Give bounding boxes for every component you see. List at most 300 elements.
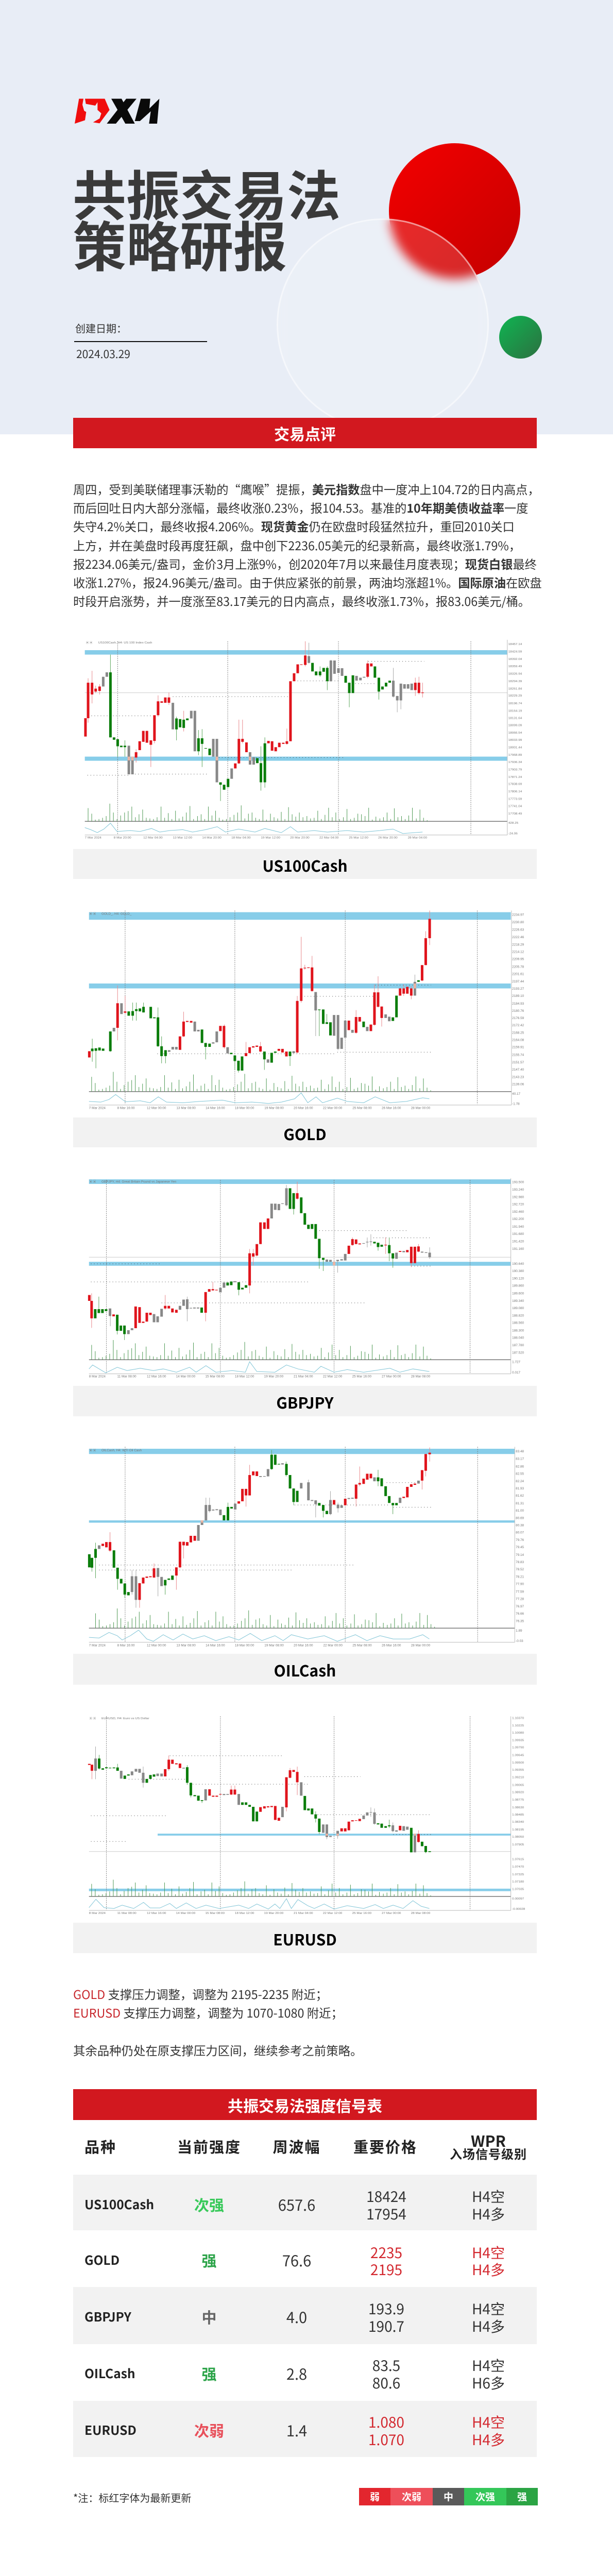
support and resistance bands (89, 1449, 515, 1523)
axis labels: 1.07035 (512, 1888, 524, 1891)
axis labels: 7 Mar 2024 (89, 1106, 106, 1110)
axis labels: 15 Mar 08:00 (206, 1375, 225, 1378)
axis labels: 82.86 (516, 1465, 524, 1469)
heading: signal table: 共振交易法强度信号表 (228, 2094, 382, 2116)
table row: US100Cash: 657.6 (278, 2194, 315, 2215)
axis labels: 83.48 (516, 1450, 524, 1453)
axis labels: 18131.64 (508, 717, 522, 720)
axis labels: 18 Mar 12:00 (235, 1375, 254, 1378)
axis labels: 81.00 (516, 1509, 524, 1513)
axis labels: 80.69 (516, 1517, 524, 1520)
axis labels: 2222.46 (512, 936, 524, 939)
axis labels: 27 Mar 00:00 (382, 1912, 401, 1915)
axis labels: 22 Mar 00:00 (323, 1643, 343, 1647)
table row: EURUSD: 1.080 (368, 2412, 404, 2432)
axis labels: 2218.29 (512, 943, 524, 946)
axis labels: 20 Mar 16:00 (294, 1643, 313, 1647)
table row: US100Cash: H4多 (472, 2204, 505, 2224)
axis labels: 2214.12 (512, 950, 524, 954)
ATR line (89, 1630, 429, 1641)
axis labels (89, 1717, 525, 1915)
volume bars (92, 1879, 431, 1896)
axis labels: 1.89 (516, 1629, 522, 1633)
table row: US100Cash (73, 2175, 537, 2230)
axis labels: 192.980 (512, 1195, 524, 1199)
axis labels: 7 Mar 2024 (85, 837, 102, 840)
axis labels: 22 Mar 04:00 (319, 837, 339, 840)
axis labels: 193.500 (512, 1180, 524, 1184)
axis labels (89, 1180, 524, 1378)
table row: GOLD (84, 2242, 505, 2280)
table row: GOLD: 76.6 (282, 2249, 311, 2271)
axis labels: OILCash, H4: WTI Oil Cash (101, 1449, 142, 1452)
axis labels: 192.200 (512, 1217, 524, 1221)
axis labels: 1.10370 (512, 1717, 524, 1720)
label: GBPJPY: GBPJPY (276, 1391, 334, 1413)
axis labels: 25 Mar 08:00 (352, 1106, 372, 1110)
axis labels: 189.860 (512, 1284, 524, 1287)
axis labels: 17741.04 (508, 805, 522, 808)
axis labels: US100Cash, H4: US 100 Index Cash (98, 641, 152, 645)
label: EURUSD: EURUSD (273, 1927, 337, 1950)
support and resistance notes: GOLD 支撑压力调整，调整为 2195-2235 附近； (73, 1985, 328, 2003)
axis labels: 2176.59 (512, 1016, 524, 1020)
grid and axes (89, 910, 512, 1105)
axis labels: 81.62 (516, 1494, 524, 1498)
axis labels: 18 Mar 12:00 (235, 1912, 254, 1915)
axis labels: 14 Mar 16:00 (206, 1106, 225, 1110)
table footnote: *注：标红字体为最新更新 (73, 2490, 191, 2505)
commentary paragraph: 而后回吐日内大部分涨幅，最终收涨0.23%，报104.53。基准的10年期美债收益率一度 (73, 499, 528, 516)
axis labels: 79.45 (516, 1546, 524, 1549)
heading: 交易点评: 交易点评 (274, 422, 336, 445)
axis labels: 22 Mar 00:00 (323, 1106, 343, 1110)
axis labels: 28 Mar 04:00 (408, 837, 428, 840)
axis labels: 18261.84 (508, 688, 522, 690)
table row: US100Cash: 18424 (366, 2186, 406, 2207)
title (73, 153, 340, 282)
table row: GBPJPY: 中 (201, 2306, 216, 2328)
strength legend (359, 2488, 538, 2505)
label: OILCash: OILCash (274, 1658, 336, 1681)
table row: US100Cash: 17954 (366, 2204, 406, 2224)
axis labels: 1.07470 (512, 1866, 524, 1869)
axis labels: 193.240 (512, 1188, 524, 1191)
axis labels: 1.07180 (512, 1880, 524, 1884)
axis labels: 78.52 (516, 1568, 524, 1571)
legend: 中: 中 (444, 2489, 453, 2503)
axis labels: 2151.57 (512, 1061, 524, 1064)
axis labels: 2143.23 (512, 1075, 524, 1079)
axis labels: 2168.25 (512, 1031, 524, 1035)
legend: 次弱: 次弱 (402, 2489, 421, 2503)
axis labels (89, 1449, 524, 1647)
label: GBPJPY (73, 1386, 537, 1416)
title: 策略研报 (73, 204, 287, 282)
table row: EURUSD: 1.070 (368, 2429, 404, 2450)
table row: OILCash: OILCash (84, 2364, 135, 2382)
axis labels: 40.17 (512, 1092, 521, 1096)
axis labels: 20 Mar 20:00 (291, 837, 310, 840)
axis labels: 17936.34 (508, 761, 522, 764)
axis labels: 191.940 (512, 1225, 524, 1228)
support and resistance notes: EURUSD 支撑压力调整，调整为 1070-1080 附近； (73, 2004, 343, 2021)
axis labels: 19 Mar 20:00 (264, 1375, 284, 1378)
axis labels: -0.03 (516, 1639, 523, 1643)
grid and axes (89, 1447, 515, 1642)
axis labels: 18392.04 (508, 658, 522, 661)
heading: 交易点评 (73, 418, 537, 448)
axis labels: 188.820 (512, 1314, 524, 1317)
date rule (74, 341, 207, 342)
table row: US100Cash: H4空 (472, 2186, 505, 2207)
creation date label: 创建日期： (75, 320, 127, 335)
axis labels: 1.07325 (512, 1873, 524, 1876)
axis labels: ▣ ▣ (86, 641, 93, 645)
axis labels: 2197.44 (512, 980, 524, 984)
axis labels: 8 Mar 20:00 (114, 837, 132, 840)
chart: EURUSD (88, 1716, 525, 1915)
axis labels: 189.340 (512, 1299, 524, 1302)
axis labels: 81.93 (516, 1487, 524, 1490)
commentary paragraph: 时段开启涨势，并一度涨至83.17美元的日内高点，最终收涨1.73%，报83.06美元/桶。 (73, 592, 530, 609)
table row: GBPJPY: 190.7 (368, 2316, 404, 2336)
axis labels: 187.780 (512, 1344, 524, 1347)
commentary paragraph: 上方，并在美盘时段再度狂飙，盘中创下2236.05美元的纪录新高，最终收涨1.79%， (73, 536, 521, 554)
axis labels: 2147.40 (512, 1068, 524, 1072)
axis labels: EURUSD, H4: Euro vs US Dollar (101, 1717, 149, 1720)
axis labels: 1.08340 (512, 1821, 524, 1824)
axis labels: 19 Mar 20:00 (264, 1912, 284, 1915)
axis labels: 188.560 (512, 1321, 524, 1325)
axis labels: 18424.59 (508, 651, 522, 654)
label: US100Cash (73, 849, 537, 879)
axis labels: 28 Mar 00:00 (411, 1643, 431, 1647)
legend: 次强: 次强 (475, 2489, 495, 2503)
column: WPR: WPR (471, 2129, 506, 2151)
axis labels: 1.07615 (512, 1858, 524, 1861)
axis labels: 14 Mar 00:00 (176, 1912, 196, 1915)
axis labels: 1.08630 (512, 1806, 524, 1809)
axis labels: 0.00097 (512, 1897, 524, 1901)
axis labels: 189.600 (512, 1292, 524, 1295)
table row: OILCash: 83.5 (372, 2355, 400, 2376)
axis labels: 77.28 (516, 1598, 524, 1601)
axis labels: 2139.06 (512, 1082, 524, 1086)
axis labels: 82.24 (516, 1480, 524, 1483)
axis labels: 78.83 (516, 1561, 524, 1564)
axis labels: 7 Mar 2024 (89, 1643, 106, 1647)
axis labels: 13 Mar 08:00 (176, 1643, 196, 1647)
table row: OILCash (84, 2355, 505, 2393)
support and resistance notes (73, 1985, 343, 2021)
label: US100Cash: US100Cash (262, 854, 348, 876)
table row: US100Cash: 次强 (194, 2194, 224, 2215)
axis labels: ▣ ▣ (89, 912, 96, 916)
axis labels: 2155.74 (512, 1053, 524, 1057)
grid and axes (89, 1716, 511, 1910)
candlesticks (89, 1448, 430, 1608)
axis labels: 1.08775 (512, 1799, 524, 1802)
axis labels: 20 Mar 16:00 (294, 1106, 313, 1110)
legend: 中 (433, 2488, 464, 2505)
table row: GBPJPY: GBPJPY (84, 2308, 131, 2326)
table row: GOLD: 强 (201, 2249, 216, 2271)
axis labels: 2209.95 (512, 957, 524, 961)
label: EURUSD (73, 1923, 537, 1953)
axis labels: 79.76 (516, 1538, 524, 1542)
axis labels: 18 Mar 04:00 (231, 837, 251, 840)
axis labels: 12 Mar 00:00 (147, 1106, 166, 1110)
axis labels: 1.09355 (512, 1769, 524, 1772)
axis labels: 190.120 (512, 1277, 524, 1280)
axis labels: 26 Mar 20:00 (379, 837, 398, 840)
axis labels: 17708.49 (508, 812, 522, 816)
table row: GBPJPY (73, 2287, 537, 2344)
table row: GOLD: 2195 (370, 2259, 402, 2280)
axis labels: 1.09500 (512, 1761, 524, 1765)
volume bars (95, 1608, 435, 1628)
axis labels: 78.21 (516, 1575, 524, 1579)
axis labels: 188.040 (512, 1336, 524, 1340)
axis labels: 191.420 (512, 1240, 524, 1243)
axis labels: 192.460 (512, 1210, 524, 1214)
table row: OILCash: 2.8 (286, 2363, 307, 2384)
label: OILCash (73, 1654, 537, 1685)
axis labels: 1.10225 (512, 1724, 524, 1727)
support and resistance bands (85, 650, 507, 761)
table row: EURUSD: H4空 (472, 2412, 505, 2432)
axis labels: 1.08050 (512, 1836, 524, 1839)
axis labels: 190.640 (512, 1262, 524, 1265)
legend: 强: 强 (517, 2489, 527, 2503)
support and resistance bands (89, 1179, 511, 1265)
axis labels: 12 Mar 16:00 (147, 1375, 166, 1378)
table row: GOLD: H4多 (472, 2259, 505, 2280)
column: 品种: 品种 (84, 2136, 116, 2157)
axis labels: 12 Mar 16:00 (147, 1912, 166, 1915)
chart: OILCash (88, 1447, 524, 1647)
axis labels: 1.09645 (512, 1754, 524, 1757)
support and resistance bands (89, 912, 511, 988)
axis labels: 14 Mar 20:00 (202, 837, 222, 840)
axis labels: 76.97 (516, 1605, 524, 1608)
column: 周波幅: 周波幅 (273, 2136, 320, 2157)
axis labels: -0.00028 (512, 1908, 525, 1911)
axis labels: 8 Mar 2024 (89, 1375, 106, 1378)
axis labels: 2184.93 (512, 1002, 524, 1005)
volume bars (92, 1072, 431, 1091)
axis labels: 25 Mar 16:00 (352, 1375, 372, 1378)
axis labels: 17903.79 (508, 769, 522, 772)
axis labels (89, 912, 524, 1110)
candlesticks (86, 641, 423, 801)
axis labels: 82.55 (516, 1472, 524, 1476)
axis labels: 17968.89 (508, 754, 522, 757)
axis labels: 28 Mar 08:00 (411, 1375, 431, 1378)
icon: frosted glass circle (277, 218, 489, 431)
icon: green circle (499, 316, 542, 359)
axis labels: 1.09065 (512, 1784, 524, 1787)
commentary paragraph: 报2234.06美元/盎司，金价3月上涨9%，创2020年7月以来最佳月度表现；现货白银最终 (73, 555, 537, 572)
axis labels: ▣ ▣ (89, 1180, 96, 1183)
candlesticks (89, 1747, 430, 1853)
legend: 次强 (464, 2488, 506, 2505)
axis labels: 2234.97 (512, 913, 524, 917)
axis labels: 28 Mar 08:00 (411, 1912, 431, 1915)
axis labels: 1.10080 (512, 1732, 524, 1735)
axis labels: 2230.80 (512, 921, 524, 924)
axis labels: 18099.09 (508, 724, 522, 727)
axis labels: 11 Mar 08:00 (117, 1912, 137, 1915)
table row: EURUSD (73, 2401, 537, 2457)
axis labels: 2159.91 (512, 1045, 524, 1049)
table row: GBPJPY: 193.9 (368, 2298, 404, 2319)
chart: GBPJPY (88, 1178, 524, 1378)
volume bars (88, 804, 428, 821)
table row: GOLD: 2235 (370, 2242, 402, 2263)
legend: 弱 (359, 2488, 390, 2505)
axis labels: 8 Mar 16:00 (117, 1643, 135, 1647)
axis labels: 189.080 (512, 1307, 524, 1310)
axis labels (85, 641, 522, 840)
axis labels: 188.300 (512, 1329, 524, 1332)
axis labels: 19 Mar 12:00 (261, 837, 281, 840)
axis labels: 14 Mar 16:00 (206, 1643, 225, 1647)
grid and axes (85, 640, 507, 835)
axis labels: 77.59 (516, 1590, 524, 1594)
axis labels: 1.09790 (512, 1747, 524, 1749)
axis labels: 191.160 (512, 1247, 524, 1251)
table row: GOLD: H4空 (472, 2242, 505, 2263)
axis labels: 21 Mar 04:00 (294, 1375, 313, 1378)
axis labels: 18359.49 (508, 666, 522, 668)
axis labels: 25 Mar 12:00 (349, 837, 369, 840)
ATR line (89, 1362, 429, 1372)
support and resistance bands (89, 1834, 511, 1891)
axis labels: 8 Mar 2024 (89, 1912, 106, 1915)
table row: GBPJPY: H4空 (472, 2298, 505, 2319)
ATR line (89, 1093, 429, 1103)
line chart: weekly range (73, 2571, 537, 2576)
axis labels: 2193.27 (512, 987, 524, 991)
axis labels: 1.09210 (512, 1776, 524, 1779)
commentary paragraph: 失守4.2%关口，最终收报4.206%。现货黄金仍在欧盘时段猛然拉升，重回2010关口 (73, 517, 515, 535)
commentary paragraph: 周四，受到美联储理事沃勒的“鹰喉”提振，美元指数盘中一度冲上104.72的日内高点， (73, 480, 540, 498)
axis labels: 8 Mar 16:00 (117, 1106, 135, 1110)
label: GOLD: GOLD (283, 1122, 327, 1145)
axis labels: ▣ ▣ (89, 1717, 96, 1720)
title: 共振交易法 (73, 153, 340, 231)
axis labels: 1.09935 (512, 1739, 524, 1742)
axis labels: 17838.69 (508, 783, 522, 786)
remaining instruments note: 其余品种仍处在原支撑压力区间，继续参考之前策略。 (73, 2041, 362, 2059)
table row: OILCash: 80.6 (372, 2372, 400, 2393)
axis labels: 428.25 (508, 822, 519, 825)
date value: 2024.03.29 (76, 346, 130, 362)
axis labels: 18294.39 (508, 680, 522, 683)
axis labels: 79.14 (516, 1553, 524, 1557)
axis labels: -24.06 (508, 833, 518, 836)
volume bars (92, 1340, 431, 1360)
table row: GOLD: GOLD (84, 2251, 120, 2269)
axis labels: 2201.61 (512, 972, 524, 976)
axis labels: 81.31 (516, 1502, 524, 1505)
axis labels: 13 Mar 12:00 (173, 837, 193, 840)
axis labels: 18229.29 (508, 694, 522, 698)
axis labels: GOLD_, H4: GOLD_ (101, 912, 132, 916)
axis labels: GBPJPY, H4: Great Britain Pound vs Japanese Yen (101, 1180, 177, 1183)
axis labels: 18 Mar 00:00 (235, 1106, 254, 1110)
table row: EURUSD: H4多 (472, 2429, 505, 2450)
axis labels: 22 Mar 12:00 (323, 1912, 343, 1915)
table row: EURUSD: 次弱 (194, 2419, 224, 2441)
axis labels: 190.380 (512, 1269, 524, 1273)
axis labels: 26 Mar 16:00 (382, 1643, 401, 1647)
axis labels: 2164.08 (512, 1038, 524, 1042)
grid and axes (89, 1178, 511, 1374)
axis labels: 1.08920 (512, 1791, 524, 1794)
axis labels: -1.78 (512, 1102, 520, 1106)
axis labels: 13 Mar 08:00 (176, 1106, 196, 1110)
heading: signal table (73, 2089, 537, 2120)
axis labels: 1.08485 (512, 1814, 524, 1817)
axis labels: ▣ ▣ (89, 1449, 96, 1452)
icon: red circle (389, 143, 520, 279)
axis labels: 192.720 (512, 1202, 524, 1206)
axis labels: 80.07 (516, 1531, 524, 1535)
commentary paragraph: 收涨1.27%，报24.96美元/盎司。由于供应紧张的前景，两油均涨超1%。国际原油在欧盘 (73, 573, 542, 591)
logo: XM (75, 99, 160, 124)
axis labels: 77.90 (516, 1583, 524, 1586)
column: 重要价格: 重要价格 (353, 2136, 417, 2157)
axis labels: 2180.76 (512, 1009, 524, 1012)
legend: 弱: 弱 (370, 2489, 380, 2503)
axis labels: 18001.44 (508, 747, 522, 750)
candlesticks (89, 910, 430, 1072)
axis labels: 22 Mar 12:00 (323, 1375, 343, 1378)
axis labels: 18 Mar 00:00 (235, 1643, 254, 1647)
axis labels: 18164.19 (508, 710, 522, 713)
table header (84, 2129, 527, 2162)
table row: EURUSD: 1.4 (286, 2419, 307, 2441)
axis labels: 11 Mar 08:00 (117, 1375, 137, 1378)
axis labels: 2205.78 (512, 965, 524, 969)
axis labels: 19 Mar 08:00 (264, 1643, 284, 1647)
axis labels: 1.727 (512, 1360, 521, 1364)
chart: US100Cash (84, 640, 522, 840)
axis labels: 1.07905 (512, 1843, 524, 1846)
axis labels: 18326.94 (508, 673, 522, 676)
axis labels: 17806.14 (508, 790, 522, 793)
legend: 次弱 (390, 2488, 433, 2505)
axis labels: 83.17 (516, 1458, 524, 1461)
column: 入场信号级别: 入场信号级别 (450, 2144, 527, 2162)
axis labels: 17871.24 (508, 776, 522, 779)
axis labels: 17773.59 (508, 798, 522, 801)
table row: GBPJPY: 4.0 (286, 2306, 307, 2328)
axis labels: 18066.54 (508, 732, 522, 735)
table row: OILCash: H4空 (472, 2355, 505, 2376)
chart: GOLD (88, 910, 524, 1110)
axis labels: 25 Mar 08:00 (352, 1643, 372, 1647)
axis labels: 187.520 (512, 1351, 524, 1354)
header background panel (0, 0, 613, 434)
label: GOLD (73, 1117, 537, 1147)
axis labels: 26 Mar 16:00 (382, 1106, 401, 1110)
legend: 强 (506, 2488, 538, 2505)
axis labels: 1.08195 (512, 1828, 524, 1832)
